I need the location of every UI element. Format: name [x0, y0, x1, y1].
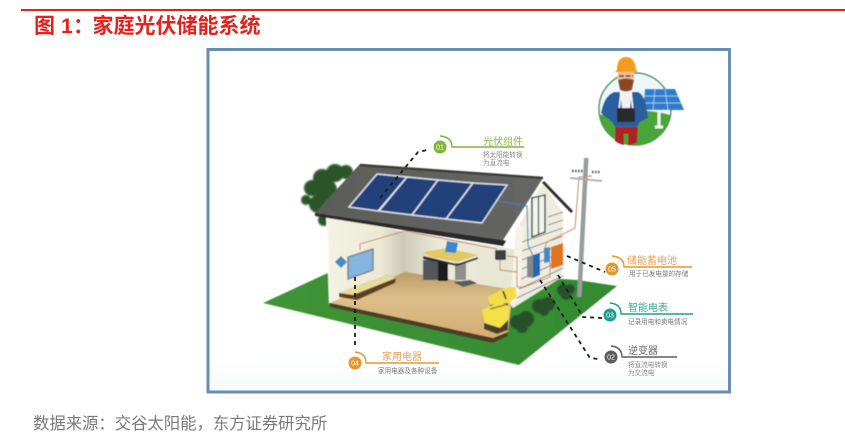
- suspenders: [619, 92, 633, 110]
- wiring: [360, 176, 592, 288]
- title: 1: [61, 15, 73, 38]
- window divider: [538, 197, 540, 234]
- callout 02: 将直流电转换: [628, 360, 668, 369]
- callout 05: 05: [608, 266, 616, 274]
- badge solar panel: [643, 89, 684, 110]
- controller: [495, 250, 506, 260]
- beard: [618, 78, 634, 92]
- solar wire: [498, 201, 533, 256]
- house side wall: [513, 183, 563, 308]
- callout 03: 记录用电和卖电情况: [628, 317, 688, 326]
- tv bench top: [339, 275, 396, 295]
- callout 02: [604, 344, 677, 377]
- callout 03: 智能电表: [628, 301, 668, 314]
- grey unit: [527, 255, 533, 278]
- callout 04: 家用电器: [382, 350, 422, 363]
- callout 05: 储能蓄电池: [627, 254, 677, 267]
- callout 04: 家用电器及各种设备: [378, 366, 438, 375]
- left wall outer edge: [327, 217, 330, 303]
- gable eave: [543, 182, 572, 212]
- image frame: [208, 50, 730, 392]
- solar panels: [349, 174, 507, 223]
- illustration: house scene: [263, 158, 617, 365]
- tablet: [617, 108, 635, 122]
- worker shirt: [620, 92, 632, 108]
- meter: [544, 247, 550, 263]
- callout 01: 01: [436, 144, 444, 152]
- callout 03: 03: [606, 312, 614, 320]
- worker jacket: [601, 92, 648, 127]
- title: ：: [73, 15, 94, 38]
- desk: [423, 241, 478, 287]
- utility pole: [577, 158, 588, 297]
- lawn: [263, 265, 617, 365]
- inverter: [533, 253, 540, 278]
- back wall: [405, 232, 520, 290]
- callout 02: 02: [607, 354, 615, 362]
- callout 01: [434, 135, 524, 167]
- callout 05: [606, 254, 692, 278]
- roof top edge and gable: [360, 165, 543, 178]
- crossarm: [570, 178, 602, 181]
- siding: [517, 212, 563, 298]
- floor: [330, 272, 513, 338]
- tv bench: [339, 275, 396, 300]
- tree: [301, 164, 353, 226]
- diamond sign: [335, 256, 347, 268]
- roof front edge: [315, 213, 506, 246]
- tv: [348, 249, 373, 279]
- callout 04: [348, 350, 439, 375]
- worker trousers: [615, 127, 638, 145]
- title: 图: [34, 15, 55, 38]
- badge circle: [599, 73, 671, 145]
- header rule: [21, 9, 845, 11]
- callout 02: 为交流电: [628, 368, 655, 377]
- floor edge: [330, 303, 508, 343]
- shrubs: [510, 284, 575, 333]
- badge grass: [600, 110, 670, 145]
- source note: 数据来源：交谷太阳能，东方证券研究所: [33, 415, 327, 433]
- sofa: [482, 287, 517, 334]
- callout 01: 光伏组件: [483, 135, 523, 148]
- glasses: [619, 75, 633, 77]
- callout 05: 用于已发电量的存储: [629, 269, 689, 278]
- window: [532, 195, 545, 237]
- badge panel post: [655, 110, 663, 127]
- callout 04: 04: [351, 360, 359, 368]
- callout 03: [604, 301, 693, 326]
- face: [618, 68, 634, 85]
- roof: [315, 164, 543, 240]
- callout 01: 将太阳能转换: [483, 150, 523, 159]
- left wall: [327, 215, 405, 303]
- battery: [551, 243, 563, 269]
- engineer badge: [599, 57, 684, 145]
- callout 01: 为直流电: [483, 158, 510, 167]
- title: 家庭光伏储能系统: [92, 14, 260, 38]
- insulators: [572, 171, 600, 172]
- hard hat: [615, 57, 638, 72]
- callout 02: 逆变器: [628, 344, 658, 357]
- front corner of wall: [510, 226, 524, 308]
- leader lines: [355, 150, 605, 359]
